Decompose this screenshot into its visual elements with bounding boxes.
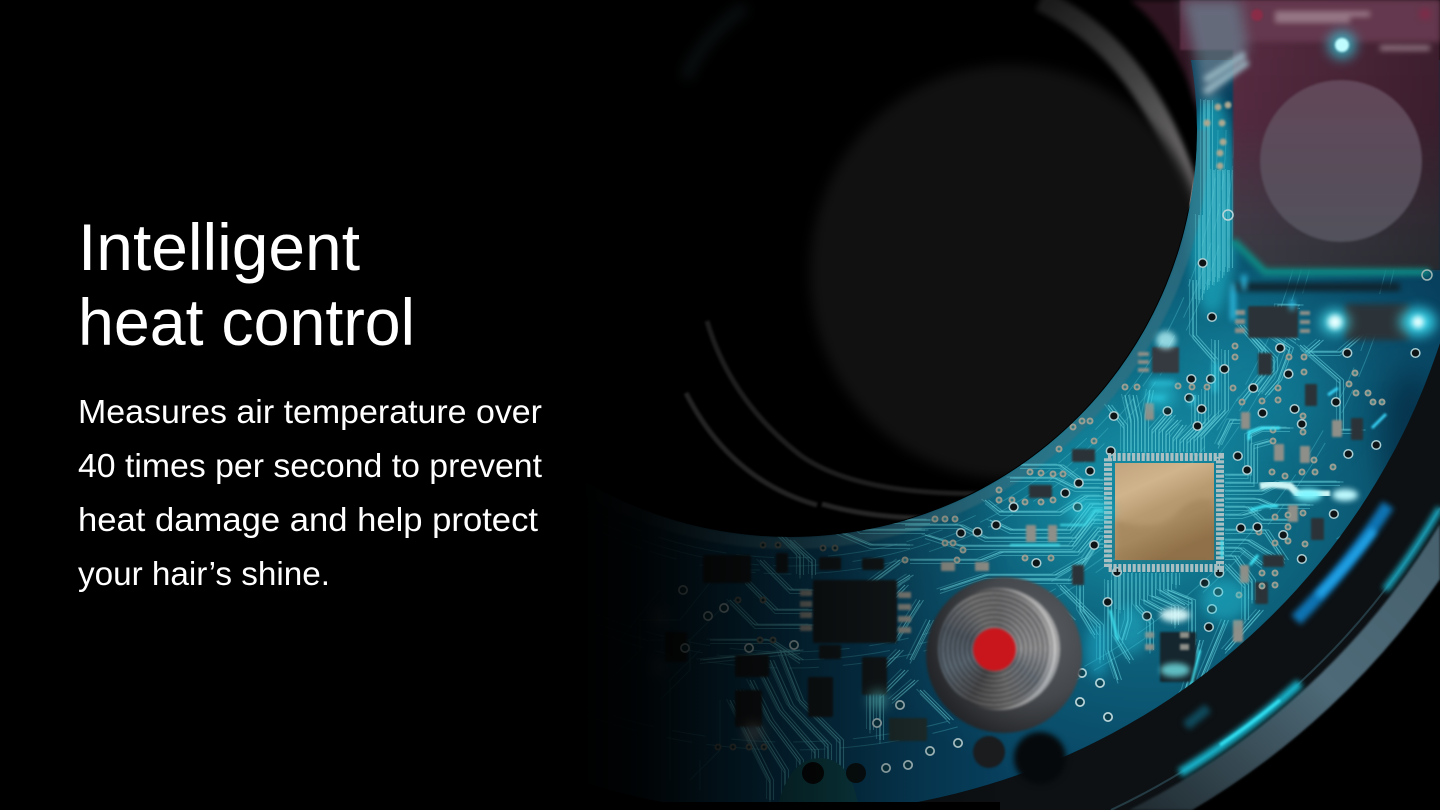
faint ghost lights on fading board <box>647 608 762 742</box>
ghosted faint traces at the fading edge <box>696 570 760 774</box>
body text <box>78 393 542 592</box>
cyan glow highlights <box>869 275 1436 709</box>
lens rim highlight <box>1040 0 1192 205</box>
lens: dark central glass <box>686 7 1210 518</box>
metal disc <box>938 588 1060 710</box>
teal glow under crimson block <box>1223 210 1432 280</box>
pale blue ribbon cable <box>1182 0 1248 100</box>
dark chips near main processor <box>1029 283 1409 682</box>
board bottom notch <box>778 758 866 805</box>
red dot <box>972 628 1016 670</box>
bottom dark circles <box>973 732 1066 784</box>
main processor chip <box>1108 457 1220 568</box>
scene: circuit board and lens illustration <box>640 0 1440 810</box>
faint pad rings at left <box>718 545 835 747</box>
translucent circle on crimson block <box>1260 80 1422 242</box>
cyan LED <box>1328 31 1356 59</box>
push button with red dot <box>926 577 1082 733</box>
small tan capacitors <box>800 310 1342 650</box>
title <box>78 210 415 359</box>
title: Intelligent <box>78 210 360 284</box>
solder pads <box>905 346 1382 595</box>
vias <box>961 263 1415 627</box>
board edge sheen <box>728 130 1208 548</box>
body text: 40 times per second to prevent <box>78 447 542 484</box>
fade to black over left of board <box>0 0 1010 810</box>
title: heat control <box>78 285 415 359</box>
crimson upper component block <box>1180 0 1440 270</box>
body text: heat damage and help protect <box>78 501 538 538</box>
large chip and small components <box>665 553 927 741</box>
body text: Measures air temperature over <box>78 393 542 430</box>
circuit board <box>640 60 1440 802</box>
copper traces: arcs <box>688 130 1394 750</box>
body text: your hair’s shine. <box>78 555 330 592</box>
via rings in lower area <box>683 590 1108 768</box>
outer housing rings <box>864 343 1440 810</box>
top arm pads <box>1207 105 1228 166</box>
dark red reflection behind rim <box>1130 0 1200 120</box>
copper traces: routed lines <box>696 99 1394 804</box>
